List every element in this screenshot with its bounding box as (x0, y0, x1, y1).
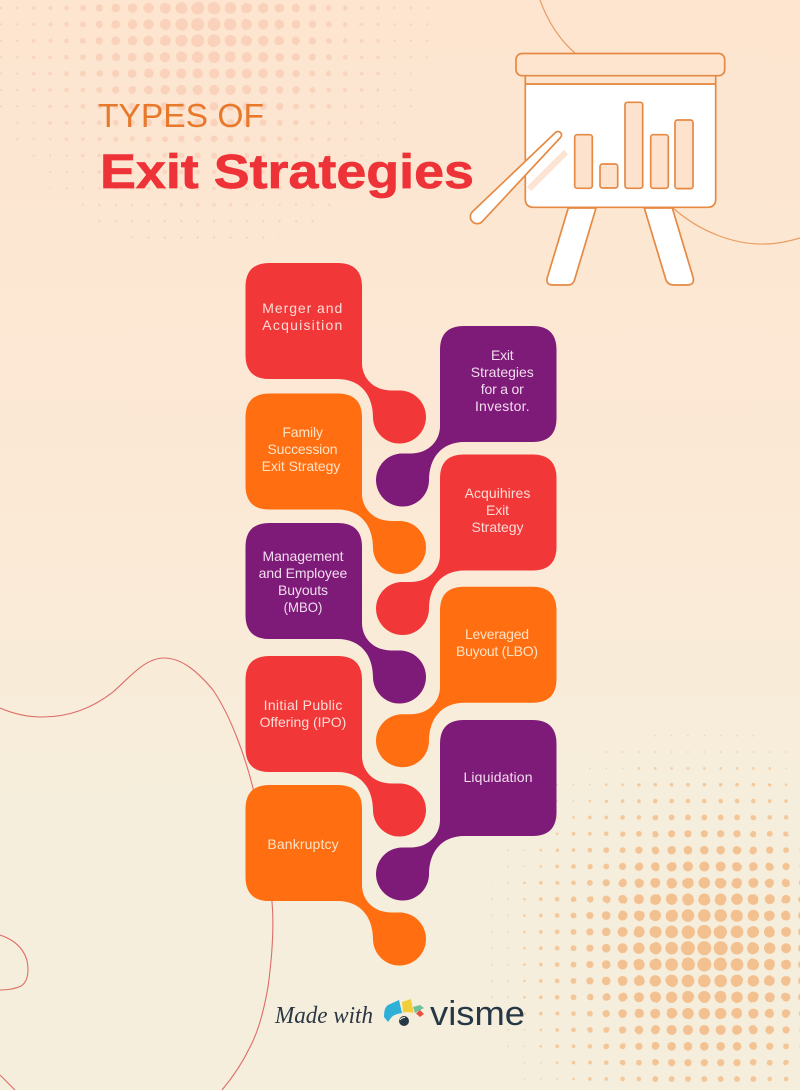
easel legs (547, 208, 693, 285)
flow step: merger and acquisition: Acquisition (262, 317, 342, 333)
flow step: management and employee buyouts (246, 523, 426, 703)
footer: made with: Made with (274, 1003, 373, 1029)
flow step: family succession exit strategy: Family (282, 424, 323, 440)
flow step: exit strategies for an investor: for a or (481, 381, 524, 397)
flow step: acquihires exit strategy: Exit (486, 502, 509, 518)
icon: presentation easel with bar chart (470, 54, 725, 285)
heading: exit strategies: Exit Strategies (100, 146, 474, 199)
flow step: leveraged buyout (376, 587, 556, 767)
halftone dots: bottom right (482, 727, 800, 1090)
heading: types of: TYPES OF (98, 97, 264, 134)
flow step: management and employee buyouts: Management (262, 548, 344, 564)
board top bar (516, 54, 725, 76)
flow step: exit strategies for an investor: Exit (491, 347, 514, 363)
flow step: merger and acquisition (246, 263, 426, 443)
flow step: leveraged buyout: Buyout (LBO) (456, 643, 538, 659)
flow step: family succession exit strategy: Succession (268, 441, 338, 457)
flow step: management and employee buyouts: Buyouts (278, 582, 328, 598)
board top strip (525, 76, 716, 84)
flow step: merger and acquisition: Merger and (262, 300, 342, 316)
footer: visme logo mark (384, 999, 424, 1026)
halftone dots: top (0, 0, 430, 250)
flow step: exit strategies for an investor: Strategies (471, 364, 534, 380)
footer: visme wordmark: visme (430, 995, 525, 1033)
pointer shadow (529, 152, 566, 189)
outline blob: top right (540, 0, 800, 244)
flow step: management and employee buyouts: (MBO) (284, 599, 322, 615)
flow step: acquihires exit strategy: Acquihires (465, 485, 530, 501)
pointer (470, 131, 562, 224)
flow step: exit strategies for an investor: Investor. (475, 398, 530, 414)
flow step: initial public offering (246, 656, 426, 836)
flow step: family succession exit strategy: Exit Strategy (262, 458, 340, 474)
flow step: bankruptcy (246, 785, 426, 965)
bars (575, 102, 693, 189)
flow step: leveraged buyout: Leveraged (465, 626, 529, 642)
flow step: exit strategies for an investor (376, 326, 556, 506)
flow step: management and employee buyouts: and Employee (259, 565, 348, 581)
flow step: bankruptcy: Bankruptcy (267, 836, 339, 852)
outline blob: left (0, 658, 273, 1090)
flow step: acquihires exit strategy: Strategy (472, 519, 524, 535)
flow step: initial public offering: Initial Public (264, 697, 342, 713)
board (525, 84, 716, 207)
flow step: liquidation (376, 720, 556, 900)
flow step: family succession exit strategy (246, 394, 426, 574)
flow step: liquidation: Liquidation (464, 769, 532, 785)
flow step: initial public offering: Offering (IPO) (260, 714, 346, 730)
flow step: acquihires exit strategy (376, 454, 556, 635)
